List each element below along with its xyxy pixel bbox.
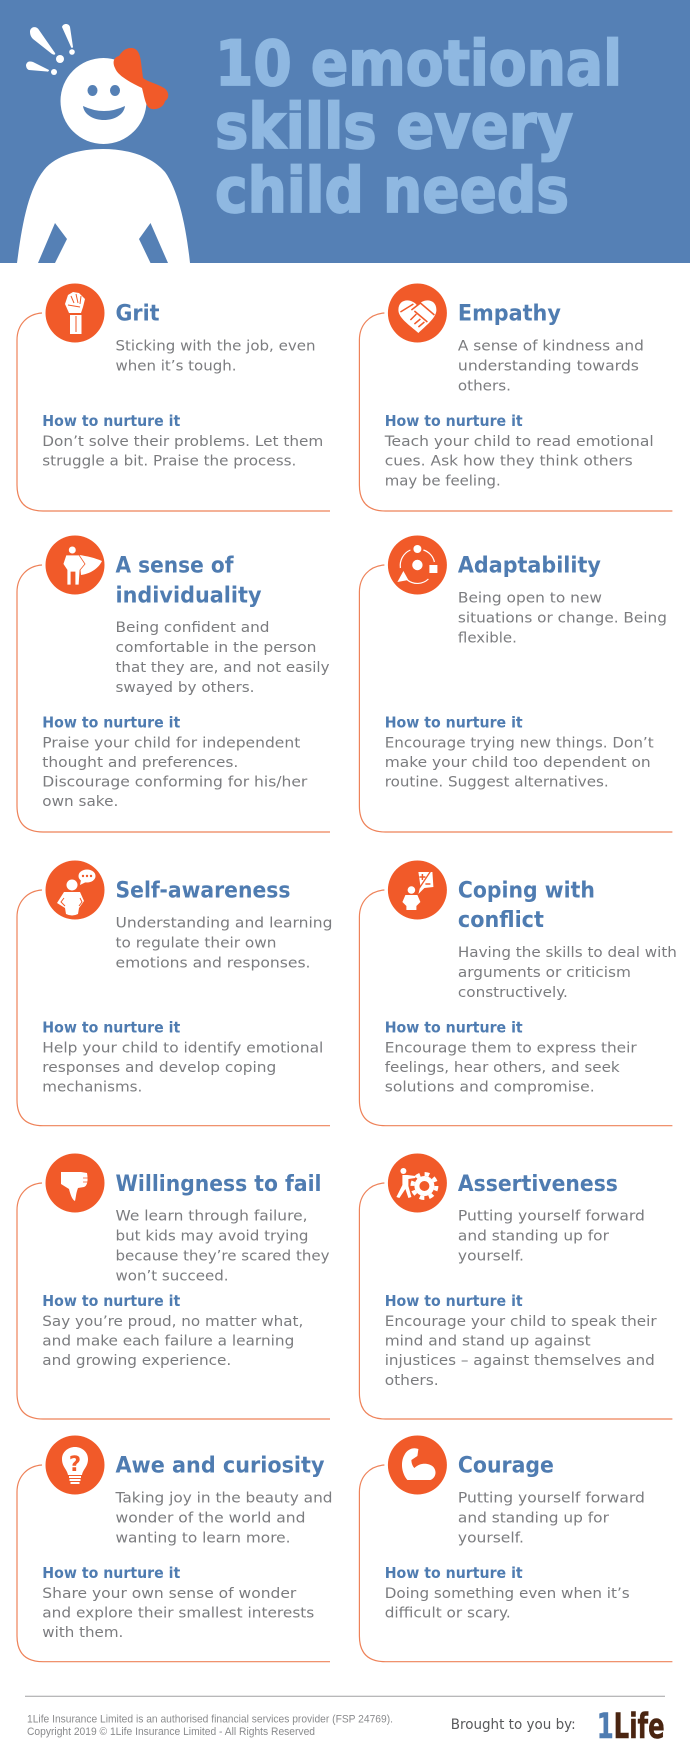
title: Coping with conflict: Coping with: [458, 879, 595, 904]
how to nurture it: How to nurture it: [42, 1565, 180, 1582]
description: that they are, and not easily: [116, 659, 330, 676]
icon: person with plus minus bubble: [388, 860, 447, 920]
how to nurture it: mechanisms.: [42, 1078, 142, 1095]
description: Being open to new: [458, 589, 602, 606]
title: Self-awareness: Self-awareness: [116, 879, 290, 904]
icon: person with speech bubble: [46, 860, 104, 920]
how to nurture it: How to nurture it: [42, 413, 180, 430]
how to nurture it: Don’t solve their problems. Let them: [42, 433, 323, 450]
description: Being confident and: [116, 619, 270, 636]
how to nurture it: cues. Ask how they think others: [385, 452, 633, 469]
panel: Empathy: [359, 284, 672, 511]
how to nurture it: [42, 1293, 303, 1369]
how to nurture it: Share your own sense of wonder: [42, 1585, 296, 1602]
how to nurture it: How to nurture it: [42, 714, 180, 731]
description: but kids may avoid trying: [116, 1227, 308, 1244]
how to nurture it: Encourage your child to speak their: [385, 1313, 657, 1330]
description: Sticking with the job, even: [116, 337, 316, 354]
how to nurture it: with them.: [42, 1624, 123, 1641]
how to nurture it: [384, 413, 654, 489]
title: Coping with conflict: [458, 879, 595, 933]
description: when it’s tough.: [116, 357, 236, 374]
description: [116, 914, 332, 971]
how to nurture it: Discourage conforming for his/her: [42, 773, 307, 790]
panel: Awe and curiosity: [17, 1436, 332, 1662]
description: [116, 619, 330, 696]
footer legal text: [27, 1714, 393, 1738]
title: A sense of individuality: A sense of: [116, 554, 234, 579]
how to nurture it: thought and preferences.: [42, 754, 238, 771]
icon: thumbs down: [46, 1154, 104, 1212]
panel: Self-awareness: [17, 860, 332, 1126]
icon: person pushing gear: [388, 1154, 447, 1212]
main title: skills every: [215, 90, 573, 163]
title: Courage: Courage: [458, 1454, 554, 1479]
description: arguments or criticism: [458, 964, 631, 981]
panel: Willingness to fail: [17, 1154, 330, 1419]
panel: Coping with conflict: [359, 860, 677, 1126]
panel: Assertiveness: [359, 1154, 672, 1419]
how to nurture it: How to nurture it: [385, 714, 523, 731]
panel: A sense of individuality: [17, 536, 330, 832]
how to nurture it: may be feeling.: [385, 472, 501, 489]
description: yourself.: [458, 1247, 524, 1264]
description: [116, 1207, 330, 1284]
how to nurture it: [42, 1565, 314, 1641]
description: We learn through failure,: [116, 1207, 308, 1224]
child illustration: [17, 24, 190, 263]
icon: question mark light bulb: [46, 1436, 104, 1494]
icon: question mark light bulb: ?: [69, 1452, 81, 1476]
footer legal text: 1Life Insurance Limited is an authorised financial services provider (FSP 24769).: [27, 1714, 393, 1726]
panel: Grit: [17, 284, 330, 511]
how to nurture it: [385, 1019, 637, 1095]
description: swayed by others.: [116, 679, 254, 696]
how to nurture it: Encourage trying new things. Don’t: [385, 734, 654, 751]
logo: 1Life: 1Life: [597, 1707, 665, 1747]
title: Grit: Grit: [116, 301, 160, 326]
description: [458, 1207, 645, 1264]
description: Taking joy in the beauty and: [114, 1489, 332, 1506]
how to nurture it: own sake.: [42, 793, 118, 810]
footer legal text: Copyright 2019 © 1Life Insurance Limited - All Rights Reserved: [27, 1726, 315, 1738]
how to nurture it: injustices – against themselves and: [385, 1352, 655, 1369]
description: others.: [458, 377, 511, 394]
how to nurture it: Doing something even when it’s: [385, 1585, 630, 1602]
how to nurture it: How to nurture it: [42, 1293, 180, 1310]
title: Coping with conflict: conflict: [458, 908, 544, 933]
title: Empathy: Empathy: [458, 301, 561, 326]
how to nurture it: [42, 1019, 323, 1095]
description: Putting yourself forward: [458, 1207, 645, 1224]
description: and standing up for: [458, 1227, 609, 1244]
description: to regulate their own: [116, 934, 276, 951]
description: A sense of kindness and: [458, 337, 644, 354]
how to nurture it: feelings, hear others, and seek: [385, 1059, 620, 1076]
description: and standing up for: [458, 1509, 609, 1526]
description: [116, 337, 316, 374]
how to nurture it: responses and develop coping: [42, 1059, 276, 1076]
main title: 10 emotional: [215, 27, 622, 100]
description: flexible.: [458, 629, 517, 646]
how to nurture it: How to nurture it: [42, 1019, 180, 1036]
how to nurture it: mind and stand up against: [385, 1332, 591, 1349]
how to nurture it: and make each failure a learning: [42, 1332, 294, 1349]
title: A sense of individuality: [116, 554, 262, 608]
how to nurture it: How to nurture it: [385, 1293, 523, 1310]
description: Putting yourself forward: [458, 1489, 645, 1506]
icon: superhero with cape: [46, 536, 104, 594]
title: Willingness to fail: Willingness to fail: [116, 1172, 322, 1197]
how to nurture it: Say you’re proud, no matter what,: [42, 1313, 303, 1330]
how to nurture it: [385, 714, 654, 790]
how to nurture it: [385, 1565, 630, 1621]
icon: cycle of shapes: [388, 536, 447, 594]
how to nurture it: make your child too dependent on: [385, 754, 651, 771]
description: Understanding and learning: [116, 914, 332, 931]
main title: [215, 27, 622, 227]
description: won’t succeed.: [116, 1267, 228, 1284]
panel: Adaptability: [359, 536, 672, 832]
how to nurture it: [385, 1293, 657, 1389]
description: wanting to learn more.: [116, 1529, 290, 1546]
description: [458, 337, 644, 394]
how to nurture it: [42, 714, 307, 810]
title: Adaptability: Adaptability: [458, 554, 601, 579]
how to nurture it: Encourage them to express their: [385, 1039, 637, 1056]
description: understanding towards: [458, 357, 639, 374]
description: [458, 589, 667, 646]
header banner: [0, 0, 690, 263]
icon: raised fist: [46, 284, 104, 342]
how to nurture it: Teach your child to read emotional: [384, 433, 654, 450]
description: emotions and responses.: [116, 954, 310, 971]
how to nurture it: Help your child to identify emotional: [42, 1039, 323, 1056]
description: situations or change. Being: [458, 609, 667, 626]
description: [458, 944, 677, 1001]
description: Having the skills to deal with: [458, 944, 677, 961]
title: A sense of individuality: individuality: [116, 583, 262, 608]
title: Assertiveness: Assertiveness: [458, 1172, 618, 1197]
description: yourself.: [458, 1529, 524, 1546]
how to nurture it: Praise your child for independent: [42, 734, 301, 751]
icon: handshake heart: [388, 284, 447, 342]
icon: flexed bicep: [388, 1436, 447, 1494]
description: [114, 1489, 332, 1546]
panel: Courage: [359, 1436, 672, 1662]
how to nurture it: struggle a bit. Praise the process.: [42, 452, 296, 469]
how to nurture it: difficult or scary.: [385, 1604, 511, 1621]
title: Awe and curiosity: Awe and curiosity: [116, 1454, 324, 1479]
how to nurture it: and growing experience.: [42, 1352, 231, 1369]
how to nurture it: How to nurture it: [385, 413, 523, 430]
description: comfortable in the person: [116, 639, 316, 656]
how to nurture it: routine. Suggest alternatives.: [385, 773, 609, 790]
main title: child needs: [215, 154, 569, 227]
description: constructively.: [458, 984, 568, 1001]
description: [458, 1489, 645, 1546]
how to nurture it: [42, 413, 323, 469]
how to nurture it: How to nurture it: [385, 1019, 523, 1036]
how to nurture it: and explore their smallest interests: [42, 1604, 314, 1621]
description: because they’re scared they: [116, 1247, 330, 1264]
how to nurture it: solutions and compromise.: [385, 1078, 595, 1095]
how to nurture it: How to nurture it: [385, 1565, 523, 1582]
how to nurture it: others.: [385, 1372, 439, 1389]
brought to you by: Brought to you by:: [451, 1716, 576, 1733]
description: wonder of the world and: [116, 1509, 306, 1526]
